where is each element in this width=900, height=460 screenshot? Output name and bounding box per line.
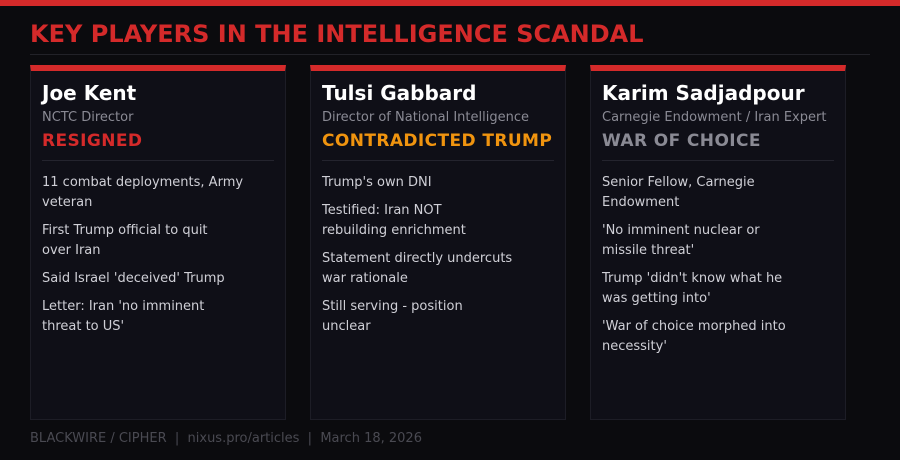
bullets [42, 175, 243, 334]
panel: Joe Kent [30, 65, 286, 420]
role: Director of National Intelligence [322, 110, 529, 125]
bullets: 'War of choice morphed into [602, 319, 786, 334]
panel: Karim Sadjadpour [590, 65, 846, 420]
bullets: Testified: Iran NOT [322, 203, 442, 218]
bullets: war rationale [322, 271, 408, 286]
bullets: Endowment [602, 195, 679, 210]
bullets: Statement directly undercuts [322, 251, 512, 266]
bullets: threat to US' [42, 319, 124, 334]
bullets: 11 combat deployments, Army [42, 175, 243, 190]
bullets: over Iran [42, 243, 101, 258]
bullets: unclear [322, 319, 371, 334]
title: KEY PLAYERS IN THE INTELLIGENCE SCANDAL [30, 20, 644, 48]
bullets: Senior Fellow, Carnegie [602, 175, 755, 190]
bullets: rebuilding enrichment [322, 223, 466, 238]
bullets: First Trump official to quit [42, 223, 208, 238]
name: Karim Sadjadpour [602, 81, 805, 105]
status: WAR OF CHOICE [602, 131, 761, 151]
bullets [322, 175, 512, 334]
bullets [602, 175, 786, 354]
bullets: Said Israel 'deceived' Trump [42, 271, 225, 286]
bullets: missile threat' [602, 243, 694, 258]
bullets: Letter: Iran 'no imminent [42, 299, 204, 314]
bullets: was getting into' [602, 291, 711, 306]
panel: Tulsi Gabbard [310, 65, 566, 420]
name: Tulsi Gabbard [322, 81, 476, 105]
role: NCTC Director [42, 110, 133, 125]
role: Carnegie Endowment / Iran Expert [602, 110, 826, 125]
bullets: necessity' [602, 339, 667, 354]
bullets: Trump's own DNI [322, 175, 432, 190]
bullets: Still serving - position [322, 299, 463, 314]
status: RESIGNED [42, 131, 142, 151]
bullets: Trump 'didn't know what he [602, 271, 782, 286]
bullets: 'No imminent nuclear or [602, 223, 760, 238]
name: Joe Kent [42, 81, 136, 105]
status: CONTRADICTED TRUMP [322, 131, 552, 151]
footer: BLACKWIRE / CIPHER | nixus.pro/articles | March 18, 2026 [30, 431, 422, 446]
bullets: veteran [42, 195, 92, 210]
